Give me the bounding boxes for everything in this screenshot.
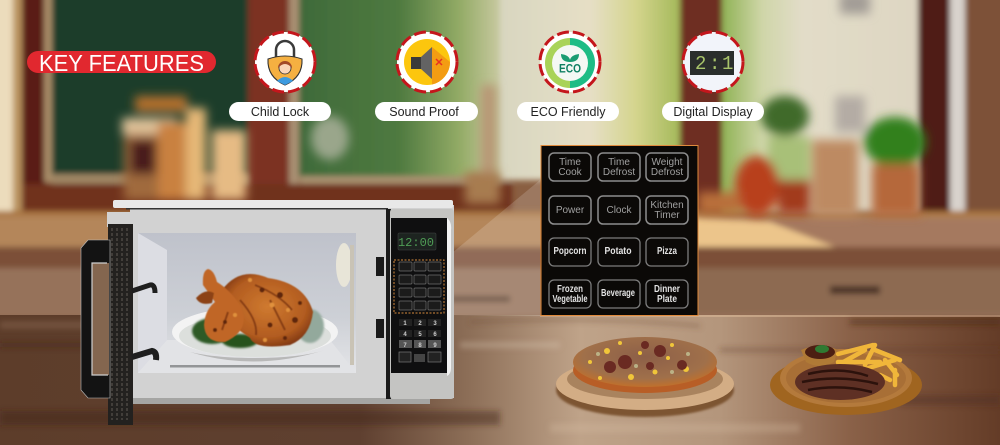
callout: enlarged control keys bbox=[541, 146, 698, 316]
key labels, dim row: Defrost bbox=[603, 167, 635, 178]
icon: child lock bbox=[255, 32, 315, 92]
key labels, bright rows: Potato bbox=[604, 246, 632, 257]
feature: child lock bbox=[229, 32, 331, 121]
icon: digital clock: 2:1 bbox=[695, 53, 733, 75]
number keypad: 7 bbox=[403, 343, 407, 349]
control panel bbox=[390, 209, 454, 399]
oven cavity bbox=[138, 233, 384, 373]
key labels, dim row: Cook bbox=[558, 167, 583, 178]
key labels, bright rows: Plate bbox=[657, 294, 677, 305]
preset keypad bbox=[394, 260, 444, 313]
plate with roast chicken bbox=[172, 269, 338, 362]
feature: digital display bbox=[662, 32, 764, 121]
microwave bbox=[81, 200, 454, 425]
label: digital display: Digital Display bbox=[673, 105, 753, 119]
number keypad: 4 bbox=[403, 332, 407, 338]
key labels, dim row: Time bbox=[608, 157, 630, 168]
food: pizza on wooden board bbox=[556, 337, 734, 417]
key labels, bright rows: Pizza bbox=[657, 246, 677, 257]
key labels, dim row: Power bbox=[556, 205, 585, 216]
feature: sound proof bbox=[375, 32, 478, 121]
microwave body bbox=[113, 200, 454, 404]
key labels, bright rows: Vegetable bbox=[552, 294, 588, 305]
heading: key features: KEY FEATURES bbox=[39, 50, 204, 76]
steak bbox=[795, 364, 885, 400]
icon: eco badge: ECO bbox=[559, 64, 581, 76]
key labels, dim row bbox=[556, 157, 684, 221]
wooden table bbox=[0, 315, 1000, 445]
key labels, dim row: Kitchen bbox=[650, 200, 684, 211]
number keypad: 1 bbox=[403, 321, 407, 327]
food: steak and fries on plate bbox=[770, 345, 922, 415]
number keypad: 9 bbox=[433, 343, 437, 349]
key labels, bright rows: Frozen bbox=[557, 284, 583, 295]
key labels, dim row: Timer bbox=[654, 210, 680, 221]
number keypad: 3 bbox=[433, 321, 437, 327]
door bbox=[81, 212, 156, 425]
key labels, dim row: Weight bbox=[652, 157, 683, 168]
number keypad: 5 bbox=[418, 332, 422, 338]
blurred jars bbox=[122, 85, 500, 204]
number keypad: 8 bbox=[418, 343, 422, 349]
key labels, bright rows: Dinner bbox=[654, 284, 680, 295]
feature: eco friendly bbox=[517, 32, 619, 121]
key labels, bright rows bbox=[552, 246, 680, 305]
number keypad: 2 bbox=[418, 321, 422, 327]
label: eco friendly: ECO Friendly bbox=[530, 105, 606, 119]
key labels, dim row: Defrost bbox=[651, 167, 683, 178]
fries bbox=[838, 345, 900, 385]
number keypad: 6 bbox=[433, 332, 437, 338]
key labels, dim row: Time bbox=[559, 157, 581, 168]
label: sound proof: Sound Proof bbox=[389, 105, 459, 119]
key labels, bright rows: Beverage bbox=[601, 288, 635, 299]
blurred plants and pots bbox=[698, 0, 926, 216]
number keypad bbox=[399, 319, 441, 362]
sauce cup bbox=[801, 345, 838, 366]
label: child lock: Child Lock bbox=[251, 105, 310, 119]
key labels, bright rows: Popcorn bbox=[554, 246, 586, 257]
key labels, dim row: Clock bbox=[606, 205, 632, 216]
digital time display: 12:00 bbox=[398, 236, 434, 250]
icon: muted speaker bbox=[397, 32, 457, 92]
zoom beam from panel to callout bbox=[446, 180, 540, 316]
